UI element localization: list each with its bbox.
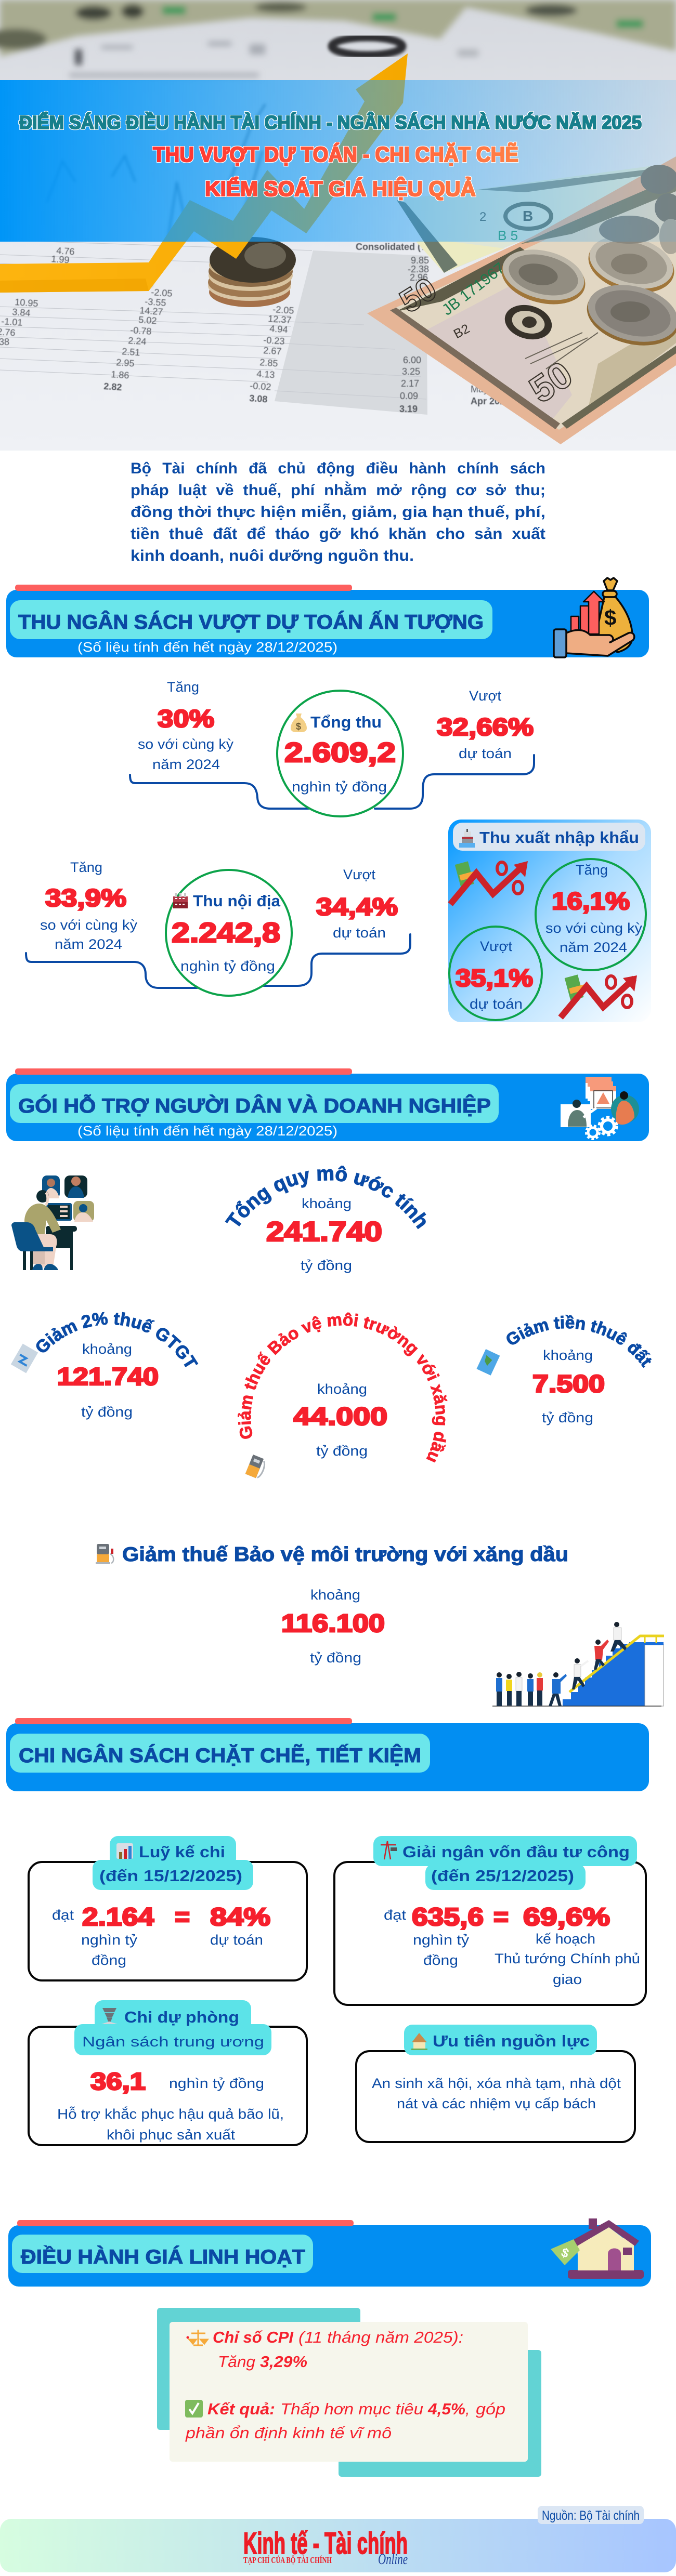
connector lines: tổng thu	[130, 755, 534, 809]
title	[19, 111, 642, 201]
circle: tổng thu: nghìn tỷ đồng	[292, 779, 387, 795]
stat: vượt 32,66%: dự toán	[459, 746, 512, 761]
card: giải ngân vốn đầu tư công: giao	[553, 1972, 582, 1987]
card: luỹ kế chi: =	[175, 1904, 190, 1931]
hero photo: financial table, arrow, coins and dollar bills: -2.05	[272, 304, 294, 316]
hero photo: financial table, arrow, coins and dollar bills: -2.38	[408, 264, 429, 274]
hero photo: financial table, arrow, coins and dollar bills	[0, 0, 676, 451]
blurred chart marks on the paper	[47, 104, 265, 285]
icon: check mark	[185, 2400, 203, 2418]
icon: ship	[459, 829, 475, 848]
section header: gói hỗ trợ: GÓI HỖ TRỢ NGƯỜI DÂN VÀ DOANH NGHIỆP	[18, 1094, 491, 1117]
curved heading: giảm thuế bảo vệ môi trường: Giảm thuế Bảo vệ môi trường với xăng dầu	[238, 1313, 447, 1462]
card: luỹ kế chi: 2.164	[82, 1904, 154, 1931]
icon: house with price tag	[551, 2218, 644, 2279]
card: giải ngân vốn đầu tư công: 69,6%	[523, 1904, 610, 1931]
circle: tổng thu: 2.609,2	[284, 737, 396, 768]
card: giải ngân vốn đầu tư công: đồng	[423, 1952, 458, 1968]
icon: support team	[561, 1077, 639, 1139]
panel: thu xuất nhập khẩu: Thu xuất nhập khẩu	[479, 828, 639, 847]
hero photo: financial table, arrow, coins and dollar bills: 6.00	[403, 355, 421, 365]
card: luỹ kế chi: 84%	[210, 1904, 270, 1931]
hero photo: financial table, arrow, coins and dollar bills: 4.13	[256, 368, 275, 380]
block: giảm thuế bảo vệ môi trường với xăng dầu	[96, 1543, 568, 1666]
hero photo: financial table, arrow, coins and dollar bills: 2.95	[116, 357, 135, 368]
fifty dollar bill: 50	[394, 271, 443, 320]
hero photo: financial table, arrow, coins and dollar bills: May	[471, 384, 488, 394]
stat: 44.000: 44.000	[293, 1403, 387, 1431]
panel: thu xuất nhập khẩu	[448, 820, 651, 1022]
stat: tăng 30%	[138, 679, 234, 772]
fifty dollar bill	[367, 156, 676, 444]
panel: chỉ số CPI: Kết quả:	[207, 2400, 275, 2418]
hero photo: financial table, arrow, coins and dollar bills: 2.17	[401, 378, 419, 389]
panel: chỉ số CPI: 4,5%	[427, 2400, 465, 2418]
stat: tổng thu	[130, 755, 534, 809]
stat: tăng 33,9%	[40, 860, 138, 952]
intro paragraph: tiền thuê đất để tháo gỡ khó khăn cho sản xuất	[131, 525, 545, 543]
card: luỹ kế chi: dự toán	[210, 1932, 263, 1948]
section header: điều hành giá	[8, 2220, 651, 2287]
hero photo: financial table, arrow, coins and dollar bills: 3.84	[12, 307, 31, 318]
stat: tăng 30%: 30%	[158, 705, 214, 732]
icon: small house	[411, 2033, 427, 2050]
hero photo: financial table, arrow, coins and dollar bills: 14.27	[139, 305, 163, 317]
card: chi dự phòng: 36,1	[90, 2068, 146, 2095]
green dollar bill: 2	[479, 210, 486, 224]
card: giải ngân vốn đầu tư công: kế hoạch	[536, 1931, 595, 1947]
footer band	[0, 2519, 676, 2572]
hero photo: financial table, arrow, coins and dollar bills: -0.78	[130, 325, 152, 337]
icon: money bag small	[291, 714, 307, 732]
icon: money bag on hand: $	[604, 605, 616, 630]
circle: thu nội địa: nghìn tỷ đồng	[180, 958, 275, 974]
hero photo: financial table, arrow, coins and dollar bills: 2.85	[259, 357, 278, 368]
connector lines: thu nội địa	[26, 934, 410, 988]
section header: điều hành giá: ĐIỀU HÀNH GIÁ LINH HOẠT	[21, 2245, 305, 2268]
hero photo: financial table, arrow, coins and dollar bills: 3.25	[402, 366, 420, 377]
hero photo: financial table, arrow, coins and dollar bills: 2.96	[410, 272, 428, 283]
source note: Nguồn: Bộ Tài chính	[542, 2508, 640, 2523]
hero photo: financial table, arrow, coins and dollar bills: 12.37	[268, 313, 292, 325]
hero photo: financial table, arrow, coins and dollar bills: 0.09	[400, 391, 418, 401]
panel: chỉ số CPI: 3,29%	[260, 2353, 307, 2371]
stat: vượt 34,4%: Vượt	[343, 867, 375, 882]
panel: chỉ số CPI: góp	[476, 2400, 505, 2418]
block: giảm thuế bảo vệ môi trường với xăng dầu: khoảng	[310, 1587, 360, 1603]
stat: 7.500	[532, 1348, 605, 1425]
hero photo: financial table, arrow, coins and dollar bills: 3.08	[249, 393, 268, 404]
circle: tăng 16,1%: so với cùng kỳ	[545, 920, 643, 936]
card: ưu tiên nguồn lực: nát và các nhiệm vụ cấp bách	[397, 2096, 596, 2111]
blue title band	[0, 80, 676, 242]
stat: tăng 30%: so với cùng kỳ	[138, 736, 234, 752]
stat: tăng 30%: năm 2024	[152, 757, 220, 772]
intro paragraph: pháp luật về thuế, phí nhằm mở rộng cơ sở thu;	[131, 481, 545, 499]
panel: chỉ số CPI: (11 tháng năm 2025):	[298, 2328, 463, 2346]
icon: map	[476, 1349, 500, 1376]
icon: bar chart	[116, 1843, 133, 1859]
section header: thu ngân sách	[6, 585, 649, 657]
title: ĐIỂM SÁNG ĐIỀU HÀNH TÀI CHÍNH - NGÂN SÁCH NHÀ NƯỚC NĂM 2025	[19, 111, 642, 133]
card: luỹ kế chi	[29, 1836, 307, 1980]
panel: chỉ số CPI	[157, 2308, 541, 2477]
table stripes	[275, 250, 427, 415]
card: giải ngân vốn đầu tư công: (đến 25/12/2025)	[431, 1867, 574, 1885]
card: luỹ kế chi: (đến 15/12/2025)	[99, 1867, 242, 1885]
stat: vượt 34,4%: dự toán	[333, 925, 386, 941]
coins on the bill	[496, 165, 676, 354]
circle: tăng 16,1%: Tăng	[576, 862, 608, 878]
panel: chỉ số CPI: phần ổn định kinh tế vĩ mô	[185, 2424, 392, 2442]
stat: 121.740: 121.740	[57, 1363, 159, 1390]
stat: tăng 33,9%: Tăng	[70, 860, 102, 875]
stat: 241.740: 241.740	[266, 1217, 382, 1247]
hero photo: financial table, arrow, coins and dollar bills: 10.95	[15, 297, 38, 309]
green dollar bill: B 5	[498, 228, 518, 243]
stat: 44.000: tỷ đồng	[316, 1443, 368, 1459]
card: chi dự phòng: Chi dự phòng	[124, 2008, 239, 2026]
icon: crane	[381, 1841, 397, 1859]
stat: 7.500: 7.500	[532, 1370, 605, 1397]
stat: 241.740: khoảng	[302, 1196, 352, 1211]
card: chi dự phòng: khôi phục sản xuất	[107, 2127, 236, 2143]
circle: tổng thu	[277, 691, 403, 816]
icon: growth chart bottom	[561, 974, 637, 1018]
circle: tăng 16,1%	[536, 859, 646, 970]
card: giải ngân vốn đầu tư công	[334, 1836, 646, 2005]
fifty dollar bill: B2	[451, 321, 472, 341]
stat: 241.740	[266, 1196, 382, 1273]
section header: thu ngân sách: (Số liệu tính đến hết ngày 28/12/2025)	[77, 639, 337, 655]
stat: 121.740: khoảng	[82, 1341, 132, 1357]
stat: 7.500: tỷ đồng	[542, 1410, 593, 1425]
card: luỹ kế chi: đạt	[52, 1907, 74, 1923]
icon: money bag small: $	[296, 721, 301, 732]
card: luỹ kế chi: nghìn tỷ	[81, 1932, 138, 1948]
card: giải ngân vốn đầu tư công: 635,6	[412, 1904, 484, 1931]
stat: vượt 32,66%: 32,66%	[437, 713, 534, 741]
green dollar bill	[397, 163, 676, 273]
section header: thu ngân sách: THU NGÂN SÁCH VƯỢT DỰ TOÁN ẤN TƯỢNG	[18, 611, 484, 633]
stat: vượt 32,66%	[437, 688, 534, 761]
source note	[538, 2506, 644, 2524]
circle: vượt 35,1%: dự toán	[470, 996, 523, 1012]
card: giải ngân vốn đầu tư công: =	[493, 1904, 509, 1931]
stat: tăng 30%: Tăng	[167, 679, 199, 695]
icon: house with price tag: $	[560, 2245, 571, 2261]
hero photo: financial table, arrow, coins and dollar bills: 1.99	[51, 254, 70, 265]
hero photo: financial table, arrow, coins and dollar bills: Apr 202	[471, 396, 505, 406]
title: KIỂM SOÁT GIÁ HIỆU QUẢ	[205, 176, 476, 201]
card: giải ngân vốn đầu tư công: đạt	[384, 1907, 407, 1923]
stat: tăng 33,9%: năm 2024	[55, 936, 122, 952]
circle: vượt 35,1%: 35,1%	[456, 964, 533, 992]
intro paragraph: kinh doanh, nuôi dưỡng nguồn thu.	[131, 547, 414, 564]
curved heading: tổng quy mô ước tính: Tổng quy mô ước tính	[225, 1166, 426, 1230]
card: chi dự phòng	[29, 2000, 307, 2145]
icon: factory	[173, 893, 188, 908]
intro paragraph	[131, 460, 545, 564]
card: ưu tiên nguồn lực	[356, 2025, 635, 2142]
section header: gói hỗ trợ	[6, 1068, 649, 1141]
title: THU VƯỢT DỰ TOÁN - CHI CHẶT CHẼ	[153, 142, 518, 166]
hero photo: financial table, arrow, coins and dollar bills: -1.01	[1, 316, 23, 328]
card: chi dự phòng: Hỗ trợ khắc phục hậu quả bão lũ,	[57, 2106, 284, 2122]
hero photo: financial table, arrow, coins and dollar bills: 4.76	[56, 245, 75, 257]
section header: gói hỗ trợ: (Số liệu tính đến hết ngày 28/12/2025)	[77, 1123, 337, 1139]
icon: money bag on hand	[554, 578, 634, 657]
block: giảm thuế bảo vệ môi trường với xăng dầu: Giảm thuế Bảo vệ môi trường với xăng dầu	[122, 1543, 568, 1566]
curved heading: giảm tiền thuê đất: Giảm tiền thuê đất	[506, 1315, 652, 1368]
icon: pump rotated	[245, 1455, 267, 1479]
panel: chỉ số CPI: ,	[465, 2400, 470, 2418]
icon: growth chart top	[450, 861, 528, 904]
hero photo: financial table, arrow, coins and dollar bills: -3.55	[145, 296, 166, 308]
illustration: people climbing stairs	[492, 1622, 664, 1706]
card: giải ngân vốn đầu tư công: nghìn tỷ	[413, 1932, 470, 1948]
card: ưu tiên nguồn lực: Ưu tiên nguồn lực	[433, 2032, 590, 2050]
coin stack	[208, 237, 296, 307]
stat: 121.740: tỷ đồng	[81, 1404, 133, 1420]
icon: tornado	[101, 2008, 118, 2024]
circle: vượt 35,1%: Vượt	[480, 939, 512, 954]
card: luỹ kế chi: đồng	[92, 1952, 126, 1968]
hero photo: financial table, arrow, coins and dollar bills: 9.85	[411, 255, 429, 266]
hero photo: financial table, arrow, coins and dollar bills: 3.19	[399, 404, 418, 414]
hero photo: financial table, arrow, coins and dollar bills: 5.02	[138, 314, 157, 326]
card: giải ngân vốn đầu tư công: Giải ngân vốn đầu tư công	[402, 1843, 630, 1861]
illustration: call-centre worker	[11, 1175, 94, 1270]
stat: vượt 34,4%: 34,4%	[316, 893, 398, 920]
logo: TẠP CHÍ CỦA BỘ TÀI CHÍNH	[243, 2555, 332, 2565]
hero photo: financial table, arrow, coins and dollar bills: 2.82	[103, 381, 122, 392]
intro paragraph: Bộ Tài chính đã chủ động điều hành chính sách	[131, 460, 545, 477]
hero photo: financial table, arrow, coins and dollar bills: Consolidated (%	[356, 242, 429, 252]
fifty dollar bill: 50	[522, 353, 580, 411]
card: luỹ kế chi: Luỹ kế chi	[139, 1843, 225, 1861]
hero photo: financial table, arrow, coins and dollar bills: 1.86	[111, 369, 129, 380]
stat: 121.740	[57, 1341, 159, 1420]
stat: 44.000	[293, 1381, 387, 1459]
hero photo: financial table, arrow, coins and dollar bills: 2.67	[263, 345, 282, 356]
section header: chi ngân sách	[6, 1718, 649, 1791]
circle: tăng 16,1%: năm 2024	[560, 940, 627, 955]
icon: tax sheet	[11, 1344, 38, 1373]
fifty dollar bill: JB 171967	[439, 259, 508, 319]
stat: vượt 32,66%: Vượt	[469, 688, 501, 704]
circle: vượt 35,1%	[449, 927, 542, 1020]
icon: fuel pump	[96, 1544, 113, 1564]
circle: thu nội địa: 2.242,8	[172, 917, 280, 948]
logo	[243, 2527, 408, 2568]
hero photo: financial table, arrow, coins and dollar bills: 4.94	[269, 323, 288, 335]
icon: scales	[189, 2330, 207, 2345]
card: chi dự phòng: Ngân sách trung ương	[82, 2034, 264, 2050]
hero photo: financial table, arrow, coins and dollar bills: -2.05	[151, 287, 173, 299]
block: giảm thuế bảo vệ môi trường với xăng dầu: tỷ đồng	[310, 1650, 361, 1666]
circle: thu nội địa	[166, 870, 292, 996]
hero photo: financial table, arrow, coins and dollar bills: 2.24	[128, 335, 147, 347]
stat: vượt 34,4%	[316, 867, 398, 941]
panel: chỉ số CPI: Thấp hơn mục tiêu	[280, 2400, 423, 2418]
hero photo: financial table, arrow, coins and dollar bills: 2.51	[122, 346, 140, 358]
card: chi dự phòng: nghìn tỷ đồng	[169, 2076, 264, 2091]
hero photo: financial table, arrow, coins and dollar bills: -0.02	[250, 380, 271, 392]
logo: Online	[378, 2551, 408, 2568]
stat: tăng 33,9%: so với cùng kỳ	[40, 917, 138, 933]
stat: 7.500: khoảng	[543, 1348, 593, 1363]
circle: tăng 16,1%: 16,1%	[552, 887, 630, 915]
curved heading: giảm 2% thuế GTGT: Giảm 2% thuế GTGT	[36, 1312, 199, 1367]
hero photo: financial table, arrow, coins and dollar bills: -0.23	[263, 335, 285, 347]
circle: thu nội địa: Thu nội địa	[193, 892, 281, 910]
block: giảm thuế bảo vệ môi trường với xăng dầu: 116.100	[281, 1610, 385, 1637]
card: ưu tiên nguồn lực: An sinh xã hội, xóa nhà tạm, nhà dột	[372, 2076, 621, 2091]
card: giải ngân vốn đầu tư công: Thủ tướng Chính phủ	[495, 1951, 640, 1966]
panel: chỉ số CPI: Tăng	[218, 2353, 255, 2371]
circle: tổng thu: Tổng thu	[310, 713, 382, 731]
rising yellow arrow	[0, 54, 408, 293]
section header: chi ngân sách: CHI NGÂN SÁCH CHẶT CHẼ, TIẾT KIỆM	[19, 1744, 421, 1767]
panel: chỉ số CPI: Chỉ số CPI	[213, 2328, 294, 2346]
stat: 44.000: khoảng	[317, 1381, 367, 1397]
stat: 241.740: tỷ đồng	[301, 1258, 352, 1273]
intro paragraph: đồng thời thực hiện miễn, giảm, gia hạn thuế, phí,	[131, 503, 545, 521]
logo: Kinh tế - Tài chính	[243, 2527, 408, 2560]
green dollar bill: B	[523, 208, 533, 224]
stat: tăng 33,9%: 33,9%	[45, 884, 126, 911]
